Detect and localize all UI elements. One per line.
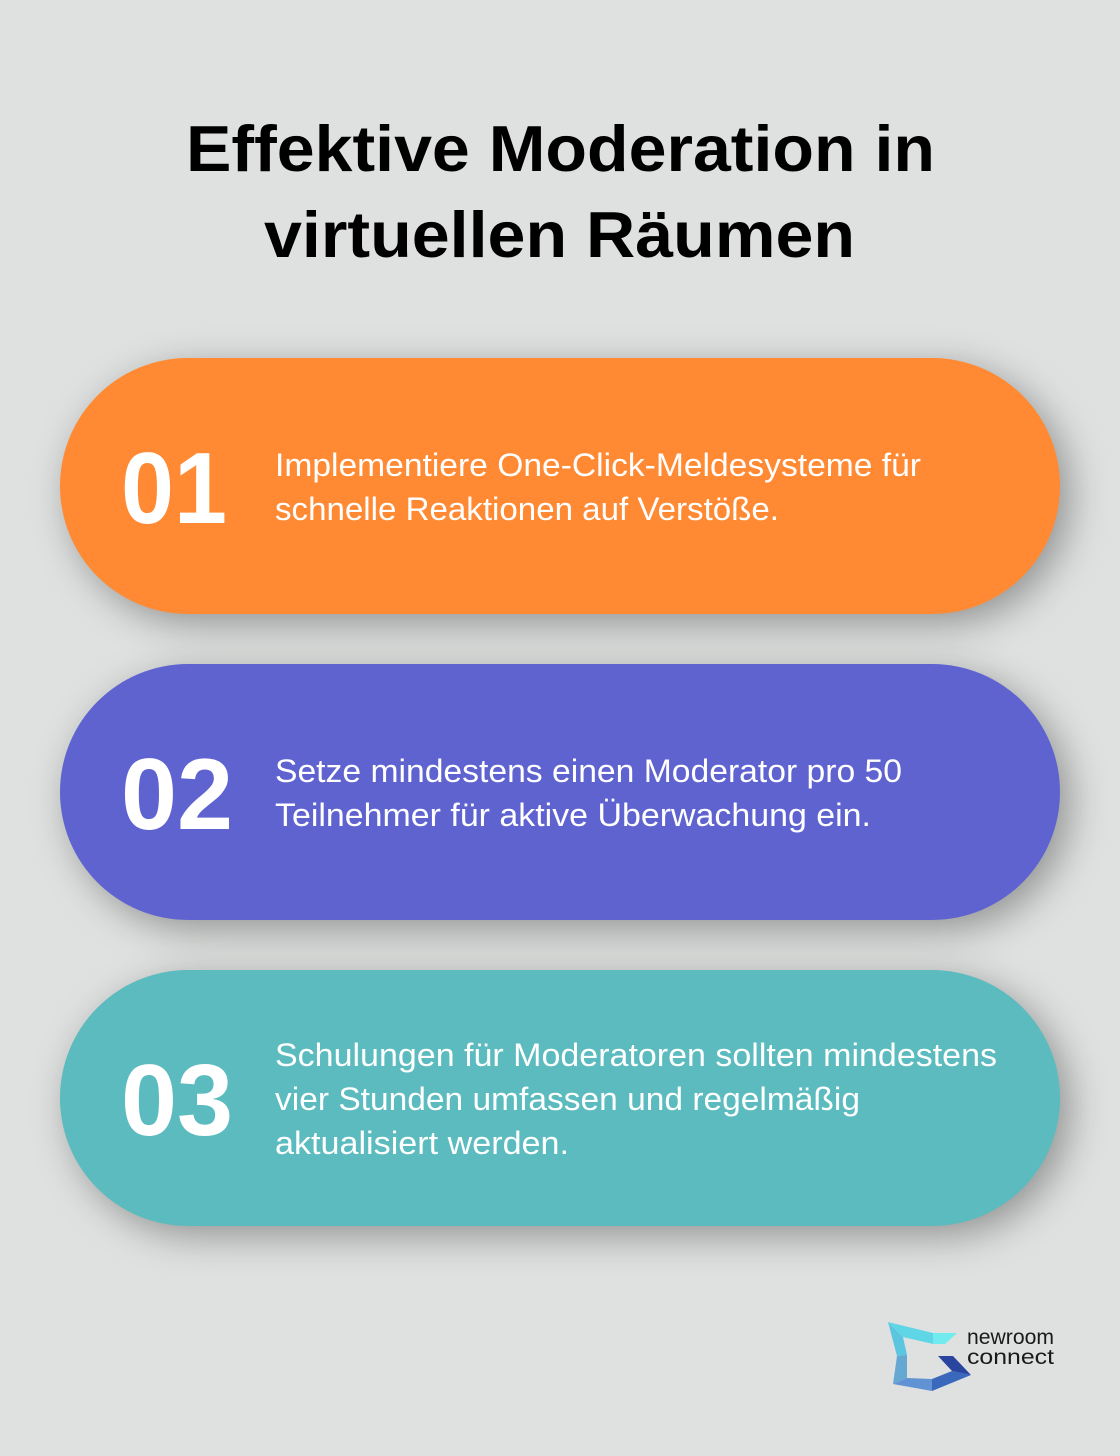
step 2 number: 02: [121, 739, 233, 851]
title: virtuellen Räumen: [264, 198, 855, 271]
title: [186, 112, 935, 271]
panel: step 3 background: [60, 970, 1060, 1226]
logo wordmark: connect: [967, 1346, 1054, 1369]
panel: step 2 background: [60, 664, 1060, 920]
step 3 text: aktualisiert werden.: [275, 1125, 569, 1161]
step 1 text: Implementiere One-Click-Meldesysteme für: [275, 447, 921, 483]
icon: logo mark: [888, 1322, 971, 1391]
logo: newroom connect: [888, 1322, 1054, 1391]
step 1 text: schnelle Reaktionen auf Verstöße.: [275, 491, 779, 527]
step 3 text: Schulungen für Moderatoren sollten mindestens: [275, 1037, 997, 1073]
logo wordmark: newroom: [967, 1326, 1054, 1349]
panel: step 1 background: [60, 358, 1060, 614]
step 2 text: [275, 753, 902, 833]
step 3 text: vier Stunden umfassen und regelmäßig: [275, 1081, 860, 1117]
step 2 text: Teilnehmer für aktive Überwachung ein.: [275, 797, 871, 833]
step 3 text: [275, 1037, 997, 1161]
step 1 number: 01: [121, 433, 227, 545]
step 1 text: [275, 447, 921, 527]
step 3 number: 03: [121, 1045, 233, 1157]
title: Effektive Moderation in: [186, 112, 935, 185]
logo wordmark: [967, 1326, 1054, 1369]
step 2 text: Setze mindestens einen Moderator pro 50: [275, 753, 902, 789]
